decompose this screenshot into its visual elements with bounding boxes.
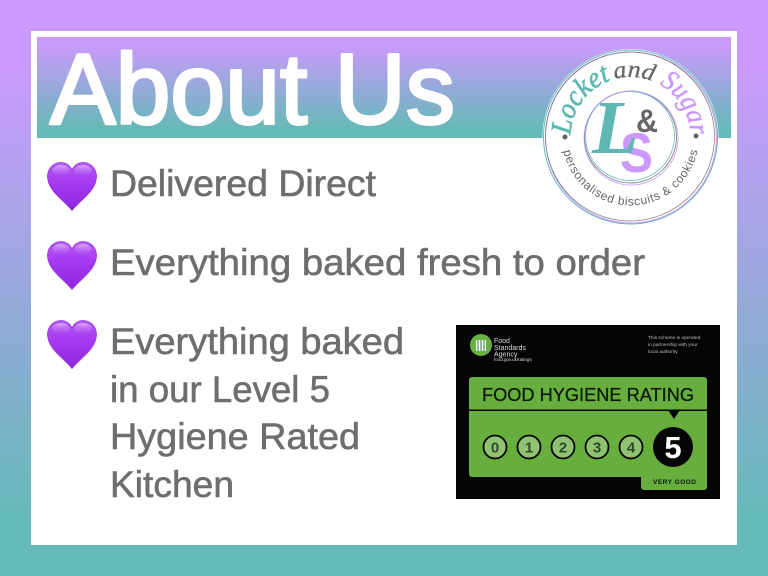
rating 5 highlighted: 5 [664,430,682,465]
list item: level 5 kitchen: in our Level 5 [110,369,330,410]
rating 3 [586,436,608,458]
scheme note: in partnership with your [648,342,698,348]
arrow pointer [668,410,680,419]
header band [37,34,731,146]
rating 3: 3 [593,440,601,456]
list item: baked fresh: Everything baked fresh to order [110,242,645,283]
FSA logo: food.gov.uk/ratings [494,357,532,362]
icon: purple heart [48,320,96,368]
monogram S: S [620,121,653,184]
rating 2 [552,436,574,458]
rating heading: FOOD HYGIENE RATING [482,384,694,405]
rating 1 [518,436,540,458]
rating 0: 0 [491,440,499,456]
list item: level 5 kitchen: Kitchen [110,464,234,505]
rating 0 [484,436,506,458]
list item: delivered direct: Delivered Direct [110,163,377,204]
FSA logo: Food [494,338,510,345]
logo text: Sugar: Sugar [660,72,704,134]
monogram L: L [591,86,638,170]
logo: Locket and Sugar [542,49,718,224]
scheme note: local authority [648,349,678,355]
title: About Us [50,34,455,146]
very good label: VERY GOOD [653,479,696,486]
list item: level 5 kitchen [48,320,404,505]
list item: level 5 kitchen: Hygiene Rated [110,416,360,457]
list item: level 5 kitchen: Everything baked [110,321,404,362]
FSA logo: Standards [494,345,526,352]
icon: purple heart [48,162,96,210]
monogram ampersand: & [636,103,658,139]
list item: delivered direct [48,162,377,210]
rating 5 highlighted [653,427,693,467]
rating 4: 4 [627,440,636,456]
logo text: Locket: Locket [551,65,610,136]
food hygiene rating badge [456,325,720,499]
scheme note [648,335,701,355]
FSA logo: Agency [494,352,518,358]
rating 4 [620,436,642,458]
logo dots [562,134,568,140]
scheme note: This scheme is operated [648,335,701,341]
logo text: tagline: personalised biscuits & cookies [561,150,698,206]
rating 1: 1 [525,440,533,456]
green rating panel [469,377,707,490]
FSA logo [470,334,532,362]
rating 2: 2 [559,440,567,456]
logo text: and: and [614,64,658,81]
icon: purple heart [48,242,96,290]
